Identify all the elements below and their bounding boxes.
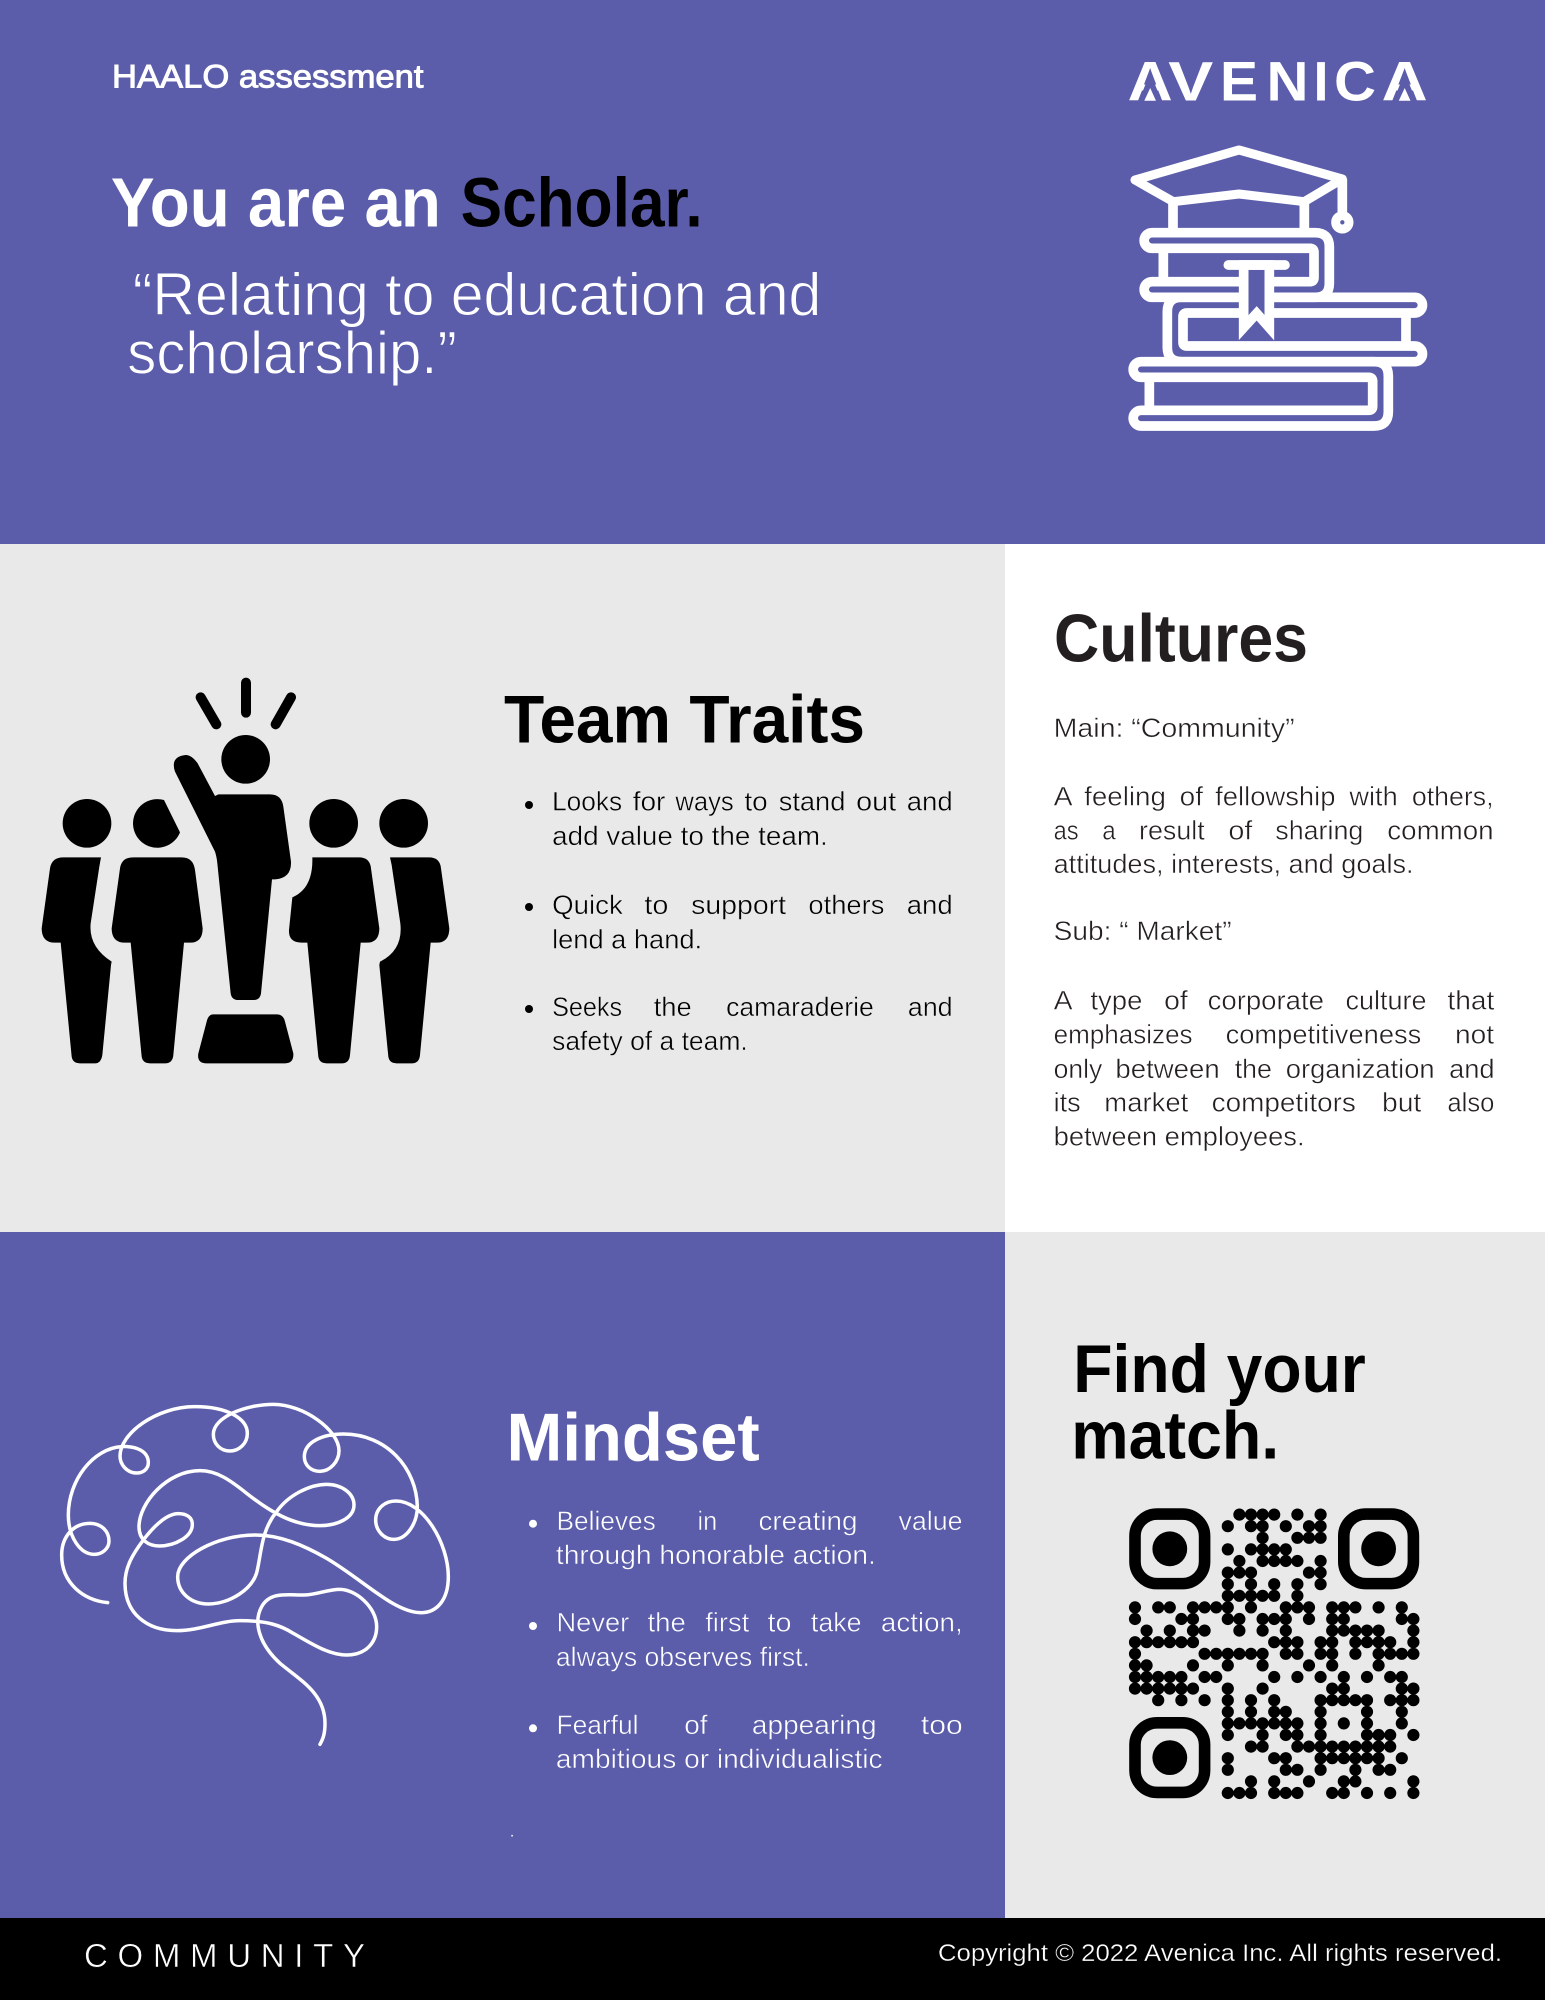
list: team traits bullets: support (691, 890, 787, 920)
list: mindset bullets: through honorable action. (556, 1540, 876, 1570)
list: team traits bullets: safety of a team. (552, 1026, 748, 1056)
label: COMMUNITY: COMMUNITY (84, 1937, 365, 1974)
list: mindset bullets: ambitious or individualistic (556, 1744, 883, 1774)
text: sub culture: its (1054, 1088, 1081, 1118)
text: main culture: result (1139, 815, 1205, 845)
text: sub culture: the (1235, 1054, 1272, 1084)
list: mindset bullets: creating (758, 1506, 857, 1536)
text: sub culture: culture (1346, 986, 1426, 1016)
QR code (1135, 1514, 1413, 1793)
icon: graduation cap on books (1133, 150, 1422, 426)
text: main culture: Main: “Community” (1054, 713, 1295, 743)
list: mindset bullets: too (921, 1710, 963, 1740)
logo: Avenica: V (1168, 50, 1213, 113)
logo: Avenica: A (1128, 50, 1173, 113)
text: sub culture: and (1449, 1054, 1495, 1084)
text: sub culture: competitors (1212, 1088, 1356, 1118)
list: mindset bullets (529, 1506, 963, 1774)
copyright: Copyright © 2022 Avenica Inc. All rights reserved. (938, 1940, 1502, 1967)
text: sub culture: between (1115, 1054, 1220, 1084)
list: mindset bullets: take (811, 1608, 862, 1638)
list: team traits bullets: ways (674, 787, 734, 817)
text: main culture: sharing (1275, 815, 1363, 845)
list: team traits bullets (525, 787, 953, 1056)
definition quote: “Relating to education and (133, 261, 821, 328)
panel: footer (0, 1918, 1545, 2000)
list: team traits bullets: stand (779, 787, 845, 817)
logo: Avenica (1128, 50, 1428, 113)
panel: mindset (0, 1232, 1005, 1918)
list: mindset bullets: action, (881, 1608, 963, 1638)
text: sub culture: of (1164, 986, 1188, 1016)
list: team traits bullets: and (907, 890, 953, 920)
heading: Find your match (1071, 1331, 1366, 1473)
text: sub culture: competitiveness (1226, 1020, 1421, 1050)
heading: Find your match: match. (1071, 1397, 1279, 1473)
list: team traits bullets: to (744, 787, 768, 817)
list: team traits bullets: to (644, 890, 668, 920)
text: sub culture: also (1447, 1088, 1494, 1118)
label: HAALO assessment: HAALO assessment (112, 58, 424, 94)
list: mindset bullets: value (898, 1506, 962, 1536)
logo: Avenica: E (1220, 50, 1258, 113)
panel: team traits (0, 544, 1005, 1232)
heading: Find your match: Find your (1073, 1331, 1366, 1407)
panel: cultures (1005, 544, 1545, 1232)
text: sub culture: emphasizes (1054, 1020, 1193, 1050)
text: main culture: feeling (1084, 782, 1166, 812)
title: You are an Scholar: Scholar. (461, 164, 703, 242)
list: mindset bullets: the (647, 1608, 686, 1638)
list: team traits bullets: for (633, 787, 665, 817)
heading: Mindset: Mindset (506, 1400, 760, 1476)
list: team traits bullets: and (908, 992, 953, 1022)
text: main culture: common (1387, 815, 1494, 845)
text: main culture: as (1054, 815, 1079, 845)
icon: line-art brain (62, 1404, 448, 1744)
list: mindset bullets: always observes first. (556, 1642, 810, 1672)
list: team traits bullets: Looks (552, 787, 622, 817)
text: main culture: of (1228, 815, 1253, 845)
logo: Avenica: A (1382, 50, 1428, 113)
list: team traits bullets: Seeks (552, 992, 622, 1022)
list: team traits bullets: Quick (552, 890, 623, 920)
text: sub culture: only (1054, 1054, 1103, 1084)
text: sub culture: market (1104, 1088, 1189, 1118)
list: mindset bullets: first (705, 1608, 750, 1638)
list: mindset bullets: Believes (556, 1506, 656, 1536)
text: sub culture: organization (1286, 1054, 1435, 1084)
list: team traits bullets: out (856, 787, 897, 817)
list: mindset bullets: of (684, 1710, 708, 1740)
text: main culture: a (1102, 815, 1117, 845)
panel: find your match (1005, 1232, 1545, 1918)
list: mindset bullets: in (697, 1506, 717, 1536)
list: team traits bullets: add value to the team. (552, 821, 828, 851)
logo: Avenica: N (1266, 50, 1308, 113)
stray period: . (510, 1824, 514, 1840)
title: You are an Scholar (111, 164, 703, 242)
text: sub culture: corporate (1208, 986, 1324, 1016)
title: You are an Scholar: You are an (111, 164, 441, 242)
text: sub culture: but (1382, 1088, 1422, 1118)
text: sub culture: A (1054, 986, 1073, 1016)
text: main culture (1054, 713, 1494, 879)
list: team traits bullets: camaraderie (726, 992, 874, 1022)
list: mindset bullets: Fearful (556, 1710, 638, 1740)
text: main culture: A (1054, 782, 1073, 812)
panel: header (0, 0, 1545, 544)
list: mindset bullets: Never (556, 1608, 629, 1638)
list: team traits bullets: lend a hand. (552, 924, 702, 954)
definition quote: scholarship.” (127, 319, 457, 386)
text: sub culture: type (1090, 986, 1142, 1016)
list: mindset bullets: to (767, 1608, 791, 1638)
icon: person standing out from a group (42, 683, 449, 1063)
list: mindset bullets: appearing (752, 1710, 877, 1740)
text: sub culture: Sub: “ Market” (1054, 916, 1232, 946)
heading: Cultures: Cultures (1054, 600, 1308, 676)
list: team traits bullets: the (654, 992, 692, 1022)
text: main culture: with (1348, 782, 1398, 812)
text: sub culture: between employees. (1054, 1122, 1305, 1152)
text: sub culture: that (1447, 986, 1495, 1016)
text: main culture: of (1180, 782, 1204, 812)
text: main culture: attitudes, interests, and goals. (1054, 849, 1414, 879)
text: main culture: others, (1412, 782, 1494, 812)
text: main culture: fellowship (1215, 782, 1336, 812)
logo: Avenica: I (1314, 50, 1328, 113)
list: team traits bullets: and (907, 787, 953, 817)
text: sub culture (1054, 916, 1495, 1152)
heading: Team Traits: Team Traits (504, 682, 865, 758)
logo: Avenica: C (1334, 50, 1376, 113)
list: team traits bullets: others (808, 890, 884, 920)
text: sub culture: not (1455, 1020, 1495, 1050)
definition quote (127, 261, 821, 386)
